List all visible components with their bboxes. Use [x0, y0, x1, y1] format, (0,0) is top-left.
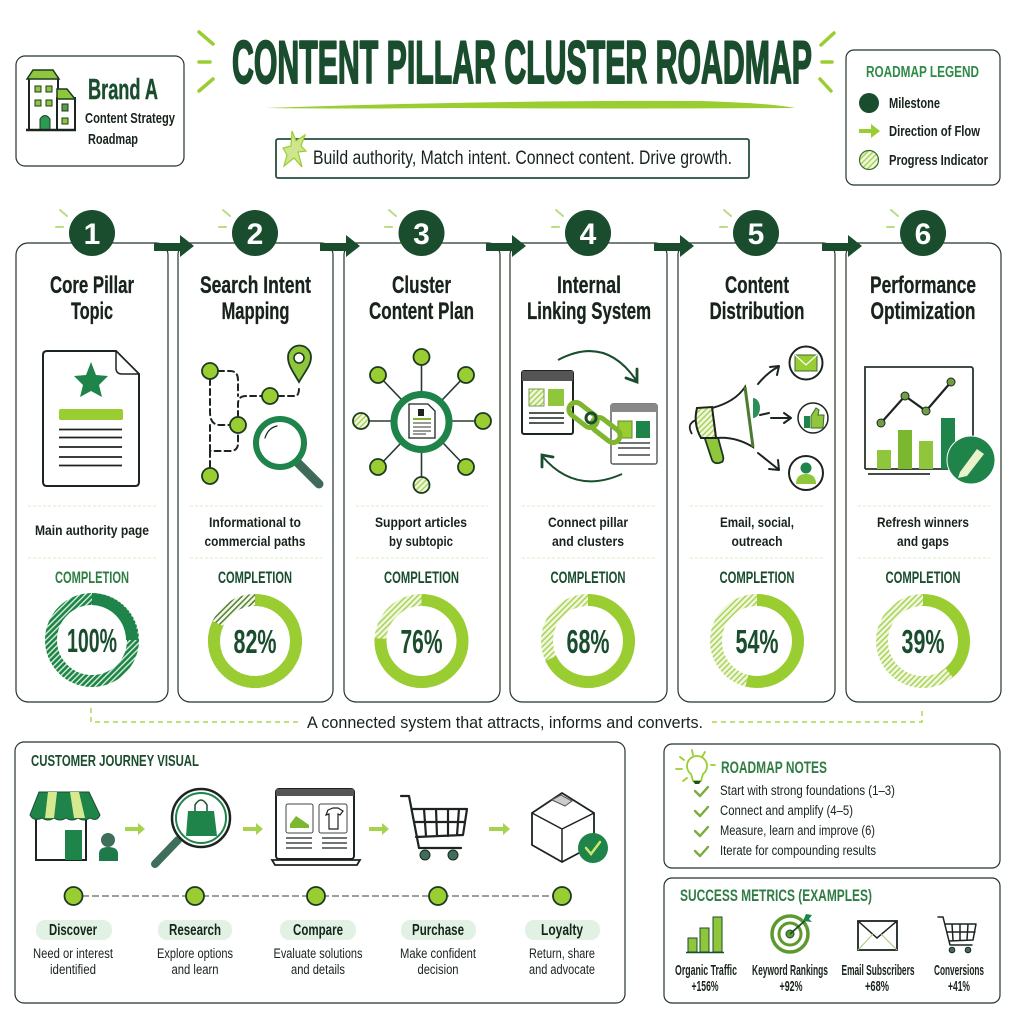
panel: success metrics: [664, 878, 1000, 1003]
stage: loyalty: Loyalty: [541, 922, 583, 939]
notes list: Iterate for compounding results: [720, 843, 876, 858]
stage: loyalty: Return, share: [529, 946, 595, 961]
milestone 4: 4: [580, 218, 597, 251]
card 6: performance optimization: [846, 243, 1001, 702]
donut 54%: [716, 600, 798, 682]
stage: purchase: decision: [418, 962, 458, 977]
milestone 2: [232, 210, 278, 256]
metric: conversions: +41%: [948, 978, 970, 995]
card 4 description: [548, 514, 628, 549]
icon: shopping cart: [401, 796, 467, 860]
metric: keyword rankings: +92%: [780, 978, 802, 995]
stage: discover: identified: [50, 962, 96, 977]
metric: conversions: [934, 917, 984, 995]
card 3 description: Support articles: [375, 514, 467, 530]
panel: roadmap legend: [846, 50, 1000, 185]
milestone 1: 1: [84, 218, 100, 251]
metric: email subscribers: +68%: [865, 978, 889, 995]
milestone 6: [900, 210, 946, 256]
card 6 description: [877, 514, 969, 549]
stage: research: Research: [169, 922, 221, 939]
card 5 title: [710, 272, 804, 325]
card 3 title: Content Plan: [369, 298, 474, 325]
donut 39%: [882, 600, 964, 682]
legend: milestone: [859, 93, 940, 113]
card 6 description: Refresh winners: [877, 514, 969, 530]
card 6 title: [870, 272, 976, 325]
notes list: Connect and amplify (4–5): [720, 803, 853, 818]
stage: research: and learn: [172, 962, 218, 977]
card 2 description: Informational to: [209, 514, 301, 530]
milestone 5: 5: [748, 218, 764, 251]
metric: organic traffic: [675, 917, 737, 995]
donut 54%: 54%: [736, 623, 778, 660]
legend: direction of flow: Direction of Flow: [889, 123, 980, 140]
metric: keyword rankings: Keyword Rankings: [752, 962, 828, 979]
completion label: COMPLETION: [384, 569, 459, 587]
card 4 title: Internal: [557, 272, 621, 299]
donut 76%: [380, 600, 462, 682]
legend: progress indicator: Progress Indicator: [889, 152, 988, 169]
card 5: content distribution: [678, 243, 835, 702]
icon: linked pages with cycle arrows: [522, 351, 657, 481]
card 4: internal linking system: [510, 243, 667, 702]
panel: customer journey: [15, 742, 625, 1003]
card 3 description: by subtopic: [389, 533, 453, 549]
donut 82%: 82%: [234, 623, 276, 660]
notes list: [695, 783, 895, 858]
journey heading: CUSTOMER JOURNEY VISUAL: [31, 753, 199, 770]
stage: compare: Compare: [293, 922, 343, 939]
donut 82%: [214, 600, 296, 682]
donut 100%: [51, 593, 138, 681]
icon: chart with edit badge: [865, 367, 995, 484]
icon: magnifier with shopping bag: [155, 789, 230, 864]
stage: compare: Evaluate solutions: [274, 946, 363, 961]
card 6 title: Performance: [870, 272, 976, 299]
stage: compare: and details: [291, 962, 345, 977]
card 3 title: Cluster: [392, 272, 451, 299]
card 1 title: Core Pillar: [50, 272, 134, 299]
card 6 description: and gaps: [897, 533, 949, 549]
flow arrows: [154, 235, 862, 257]
notes list: Measure, learn and improve (6): [720, 823, 875, 838]
title rays: [199, 32, 834, 91]
brand name: Brand A: [88, 74, 158, 106]
card 5 description: outreach: [732, 533, 782, 549]
title underline: [265, 101, 795, 108]
connector caption: [91, 708, 922, 732]
donut 68%: [547, 600, 629, 682]
icon: delivered box: [532, 793, 608, 863]
completion label: COMPLETION: [218, 569, 292, 587]
completion label: COMPLETION: [55, 569, 129, 587]
metric: conversions: Conversions: [934, 962, 984, 979]
card 3: cluster content plan: [344, 243, 500, 702]
donut 100%: 100%: [67, 622, 117, 659]
stage: research: Explore options: [157, 946, 233, 961]
brand subtitle: Content Strategy: [85, 110, 175, 127]
icon: hub and spoke cluster: [353, 349, 491, 493]
milestone 6: 6: [915, 218, 931, 251]
card 1 title: Topic: [71, 298, 113, 325]
metric: organic traffic: Organic Traffic: [675, 962, 737, 979]
metrics heading: SUCCESS METRICS (EXAMPLES): [680, 887, 872, 905]
legend: direction of flow: [859, 123, 980, 140]
milestone 4: [565, 210, 611, 256]
stage: loyalty: [525, 920, 600, 977]
brand subtitle: Roadmap: [88, 131, 138, 148]
card 4 description: and clusters: [552, 533, 624, 549]
icon: sparkle star: [283, 131, 306, 167]
icon: intent map with magnifier: [202, 346, 319, 484]
completion label: COMPLETION: [886, 569, 960, 587]
milestone 2: 2: [247, 218, 263, 251]
card 2 title: Mapping: [222, 298, 290, 325]
icon: megaphone with channels: [690, 346, 828, 490]
notes heading: ROADMAP NOTES: [721, 759, 827, 777]
card 5 description: [720, 514, 794, 549]
icon: light bulb: [676, 750, 715, 784]
metric: email subscribers: [842, 921, 914, 995]
completion label: COMPLETION: [550, 569, 626, 587]
donut 68%: 68%: [566, 623, 610, 660]
stage: purchase: Purchase: [412, 922, 464, 939]
card 2 title: [200, 272, 311, 325]
legend heading: ROADMAP LEGEND: [866, 64, 979, 81]
metric: email subscribers: Email Subscribers: [842, 962, 914, 979]
icon: building: [26, 70, 76, 130]
card 2 description: [204, 514, 306, 549]
card 5 title: Content: [725, 272, 789, 299]
stage: discover: Need or interest: [33, 946, 113, 961]
card 1 title: [50, 272, 134, 325]
arrow: [243, 823, 263, 835]
stage: research: [157, 920, 233, 977]
arrow: [489, 823, 510, 835]
milestone 1: [69, 210, 115, 256]
connector caption: A connected system that attracts, informs and converts.: [307, 713, 703, 732]
icon: laptop comparison: [272, 789, 360, 865]
card 3 description: [375, 514, 467, 549]
card 5 description: Email, social,: [720, 514, 794, 530]
panel: roadmap notes: [664, 744, 1000, 868]
legend: milestone: Milestone: [889, 95, 940, 112]
card 1 description: Main authority page: [35, 522, 149, 538]
legend: progress indicator: [860, 150, 988, 170]
tagline box: [276, 131, 749, 178]
card 4 description: Connect pillar: [548, 514, 628, 530]
card 4 title: [527, 272, 651, 325]
card 6 title: Optimization: [870, 298, 976, 325]
card 2: search intent mapping: [178, 243, 333, 702]
stage: purchase: Make confident: [400, 946, 476, 961]
card 4 title: Linking System: [527, 298, 651, 325]
tagline: Build authority, Match intent. Connect content. Drive growth.: [313, 148, 732, 169]
metric: keyword rankings: [752, 914, 828, 995]
stage: discover: Discover: [49, 922, 97, 939]
notes list: Start with strong foundations (1–3): [720, 783, 895, 798]
icon: storefront: [30, 792, 118, 861]
card 5 title: Distribution: [710, 298, 804, 325]
arrow: [369, 823, 389, 835]
card 1: core pillar topic: [16, 243, 168, 702]
milestone badges: [56, 210, 946, 256]
icon: document with star: [43, 351, 139, 486]
stage: discover: [33, 920, 113, 977]
milestone 3: 3: [413, 218, 430, 251]
brand subtitle: [85, 110, 175, 148]
card 3 title: [369, 272, 474, 325]
card 2 title: Search Intent: [200, 272, 311, 299]
metric: organic traffic: +156%: [692, 978, 718, 995]
journey timeline: [64, 887, 571, 905]
milestone 5: [733, 210, 779, 256]
milestone 3: [398, 210, 444, 256]
donut 39%: 39%: [902, 623, 944, 660]
arrow: [125, 823, 145, 835]
donut 76%: 76%: [400, 623, 442, 660]
stage: purchase: [400, 920, 476, 977]
completion label: COMPLETION: [720, 569, 794, 587]
stage: compare: [274, 920, 363, 977]
card 2 description: commercial paths: [204, 533, 306, 549]
brand card: [16, 56, 184, 166]
stage: loyalty: and advocate: [529, 962, 595, 977]
